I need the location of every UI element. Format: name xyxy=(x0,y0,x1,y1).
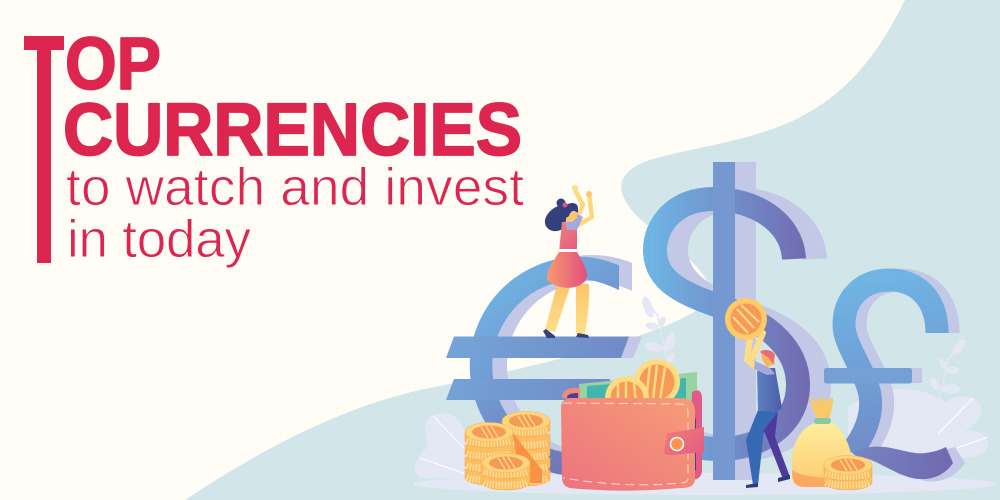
title CURRENCIES: CURRENCIES xyxy=(63,88,522,171)
woman head xyxy=(562,202,578,222)
wallet body xyxy=(561,398,695,491)
man shoes xyxy=(746,475,790,488)
euro shadow xyxy=(492,255,632,452)
front coin stack xyxy=(482,454,530,490)
coin stacks xyxy=(465,412,550,490)
money bag xyxy=(792,397,872,490)
large coin in wallet xyxy=(634,359,680,405)
money bag base xyxy=(792,470,845,487)
man front leg xyxy=(746,410,778,485)
woman figure xyxy=(543,185,592,338)
ground shadow xyxy=(413,473,997,495)
euro top bar xyxy=(446,336,629,358)
pound tail xyxy=(853,447,953,479)
banknote inner xyxy=(587,378,686,405)
money bag top xyxy=(810,397,833,420)
man torso xyxy=(757,368,782,412)
wallet xyxy=(561,359,704,491)
dollar S shadow xyxy=(661,199,819,449)
title xyxy=(24,22,524,269)
money bag body xyxy=(792,422,852,487)
pound symbol xyxy=(824,280,965,481)
middle sprig xyxy=(640,295,677,364)
woman hair xyxy=(545,198,570,231)
banknote xyxy=(579,372,697,405)
woman hands xyxy=(572,185,592,197)
euro arc xyxy=(481,268,640,465)
woman shoes xyxy=(543,329,589,338)
subtitle line two: in today xyxy=(67,210,252,269)
woman torso xyxy=(559,222,577,252)
man arms xyxy=(747,333,763,368)
woman legs xyxy=(545,284,589,335)
wallet button xyxy=(670,438,684,450)
dollar vertical bar xyxy=(713,162,735,480)
man back leg xyxy=(755,410,790,479)
subtitle line one: to watch and invest xyxy=(66,158,524,217)
man shoulder xyxy=(754,361,775,375)
pound shadow xyxy=(855,280,948,452)
woman arms xyxy=(574,188,592,225)
coin held by man xyxy=(725,298,767,340)
man figure xyxy=(725,298,790,488)
wallet stitching xyxy=(563,403,688,485)
man head xyxy=(760,350,775,367)
title T bar xyxy=(24,36,64,263)
dollar S curve xyxy=(640,199,798,449)
pound curve xyxy=(844,280,937,452)
wallet back flap xyxy=(562,388,580,398)
wallet back strip xyxy=(690,390,702,480)
euro symbol xyxy=(446,268,650,466)
left coin stack xyxy=(465,422,513,485)
small coin in wallet xyxy=(605,376,649,420)
pound crossbar xyxy=(824,368,912,384)
title TOP: OP xyxy=(65,22,161,105)
woman belt xyxy=(559,249,577,252)
woman skirt xyxy=(547,252,587,288)
euro lower bar xyxy=(446,379,610,400)
shadow on back stack xyxy=(513,433,542,483)
left foliage xyxy=(415,413,470,478)
dollar vertical bar shadow xyxy=(735,162,756,480)
right foliage xyxy=(848,337,988,458)
coin stack beside bag xyxy=(824,456,872,490)
back coin stack xyxy=(502,412,550,486)
euro top bar shadow xyxy=(621,336,642,358)
wallet strap xyxy=(664,427,704,455)
money bag tie xyxy=(814,418,831,424)
dollar symbol xyxy=(640,162,819,480)
woman sleeve xyxy=(565,213,583,230)
